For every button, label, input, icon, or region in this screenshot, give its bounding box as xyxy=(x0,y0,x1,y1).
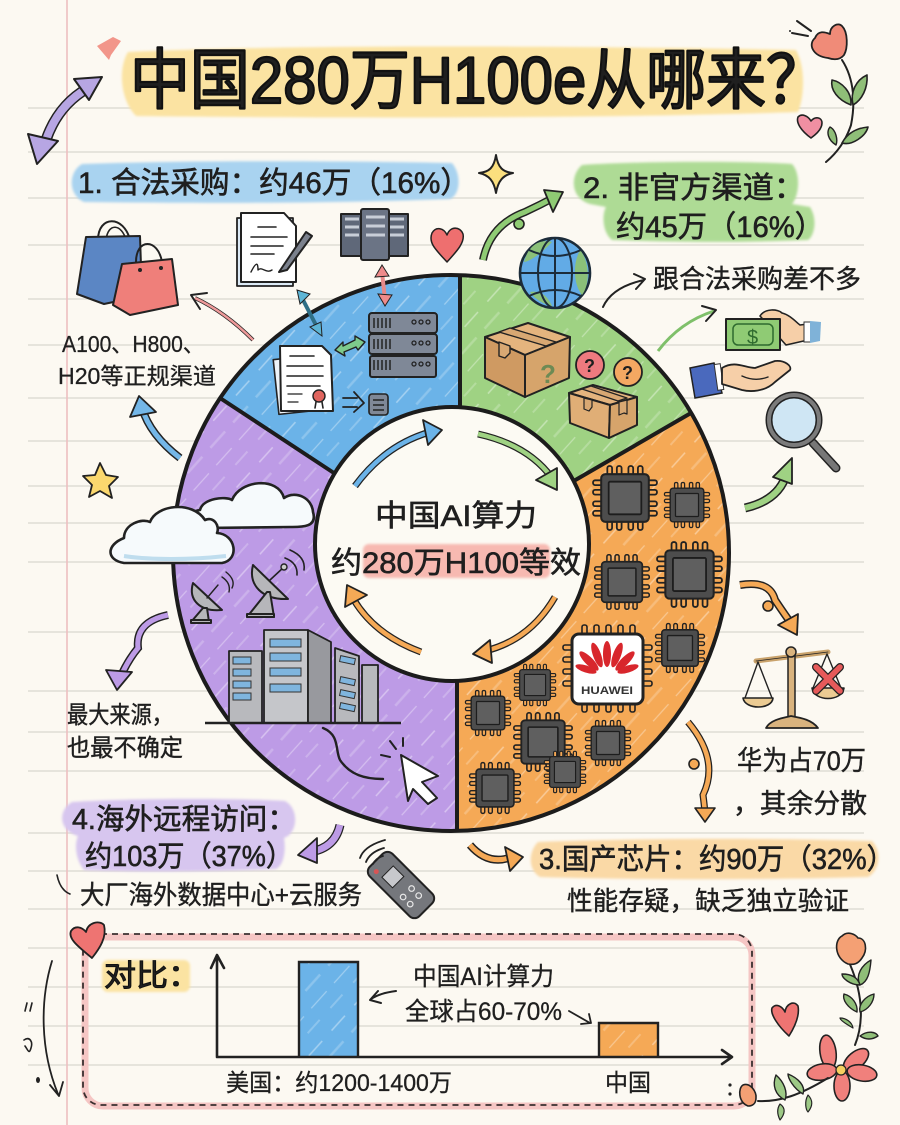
note: largest but least certain: 最大来源， xyxy=(67,702,173,729)
heading: section 2 unofficial channels: 约45万（16%） xyxy=(616,211,824,244)
callout: China AI share: 中国AI计算力 xyxy=(413,963,554,991)
callout: China AI share: 全球占60-70% xyxy=(405,998,562,1026)
arrow: center green xyxy=(478,434,557,490)
segment: green unofficial xyxy=(458,275,691,552)
icon: globe xyxy=(520,238,590,308)
icon: server tower xyxy=(341,209,408,260)
icon: packages with question marks: ? xyxy=(622,363,633,383)
arrow: left margin doodle xyxy=(24,961,63,1096)
note: legal channels: A100、H800、 xyxy=(62,331,204,357)
note: largest but least certain xyxy=(67,702,183,762)
icon: data center buildings xyxy=(205,630,401,723)
note: performance doubt: 性能存疑，缺乏独立验证 xyxy=(567,886,849,916)
heading: section 4 overseas remote access xyxy=(62,799,296,873)
icon: pink double arrow xyxy=(375,265,392,306)
icon: shopping bags xyxy=(77,221,178,315)
icon: yellow star xyxy=(83,463,118,498)
icon: packages with question marks xyxy=(485,323,642,438)
segment: orange domestic xyxy=(457,413,729,831)
heading: section 1 legal purchases: 1. 合法采购：约46万（16%） xyxy=(78,167,470,200)
arrow: to section 2 xyxy=(483,190,563,260)
bar label: China: 中国 xyxy=(605,1070,651,1097)
arrow: pink to bags xyxy=(191,293,253,340)
note: legal channels xyxy=(58,331,216,389)
icon: remote control xyxy=(360,840,437,921)
note: Huawei share: ，其余分散 xyxy=(733,789,867,819)
bar label: US: 美国：约1200-1400万 xyxy=(226,1070,452,1097)
icon: certificate document xyxy=(273,346,333,414)
center label: total computing power xyxy=(331,500,581,580)
arrow: orange to section 3 heading xyxy=(470,845,523,871)
bar chart: US vs China xyxy=(211,955,732,1064)
icon: balance scale with red cross xyxy=(743,647,844,728)
segment: purple overseas xyxy=(173,398,458,831)
note: Huawei share: 华为占70万 xyxy=(737,746,866,776)
icon: signed document with pen xyxy=(237,213,312,286)
icon: packages with question marks: ? xyxy=(540,359,556,389)
arrow: green to magnifier xyxy=(745,458,792,508)
note: Huawei share xyxy=(733,746,867,819)
heading: section 4 overseas remote access: 约103万（37%） xyxy=(85,840,293,873)
arrow: thin dark note arrow xyxy=(603,274,645,307)
label: comparison: 对比： xyxy=(104,960,200,993)
center label: total computing power: 中国AI算力 xyxy=(375,500,537,533)
icon: Huawei chip: HUAWEI xyxy=(581,685,633,697)
heading: section 2 unofficial channels xyxy=(574,162,824,244)
donut chart: four sources xyxy=(173,275,729,831)
icon: money exchange hands: $ xyxy=(747,327,758,349)
title: 中国280万H100e从哪来？ xyxy=(130,43,826,117)
segment: blue legal xyxy=(220,275,460,552)
icon: pink diamond sparkle xyxy=(97,37,121,60)
arrow: center orange right xyxy=(473,597,555,663)
icon: bottom right floral xyxy=(728,933,878,1120)
icon: heart top-left of panel xyxy=(70,922,105,958)
chips: domestic chips xyxy=(465,466,722,813)
heading: section 4 overseas remote access: 4.海外远程访问： xyxy=(72,803,296,836)
arrow: purple to largest source note xyxy=(106,615,168,690)
icon: magnifying glass xyxy=(769,395,836,468)
note: largest but least certain: 也最不确定 xyxy=(67,735,183,762)
arrow: orange to section 3 note xyxy=(688,722,715,822)
arrow: center orange left xyxy=(345,585,421,652)
icon: money exchange hands xyxy=(690,310,821,398)
arrow: blue to legal note xyxy=(130,396,180,458)
callout: China AI share xyxy=(370,963,591,1026)
icon: top right flower xyxy=(790,21,868,162)
arrow: orange to scale xyxy=(740,584,798,635)
icon: small arrow to list xyxy=(343,392,388,415)
heading: section 2 unofficial channels: 2. 非官方渠道： xyxy=(583,172,805,205)
panel: comparison xyxy=(83,934,752,1106)
icon: green double arrow xyxy=(335,336,365,356)
icon: cursor with squiggle xyxy=(323,728,438,804)
note: legal channels: H20等正规渠道 xyxy=(58,363,216,389)
arrow: center blue xyxy=(355,420,442,486)
note: big firms overseas data centers and cloud: 大厂海外数据中心+云服务 xyxy=(80,880,362,910)
icon: teal double arrow xyxy=(297,290,322,336)
icon: rack server xyxy=(369,313,437,377)
arrow: purple to section 4 xyxy=(298,825,340,863)
center label: total computing power: 约280万H100等效 xyxy=(331,547,581,580)
icon: yellow sparkle xyxy=(479,155,513,193)
icon: packages with question marks: ? xyxy=(584,356,595,376)
arrow: thin green to money xyxy=(658,306,716,351)
note: roughly equal to legal purchases: 跟合法采购差不多 xyxy=(653,264,861,294)
icon: small heart bottom right xyxy=(772,1003,798,1036)
icon: Huawei chip xyxy=(563,625,652,712)
icon: heart xyxy=(431,228,463,262)
icon: satellite dishes xyxy=(191,550,304,623)
icon: clouds xyxy=(110,483,314,563)
arrow: purple double-headed xyxy=(28,77,102,164)
